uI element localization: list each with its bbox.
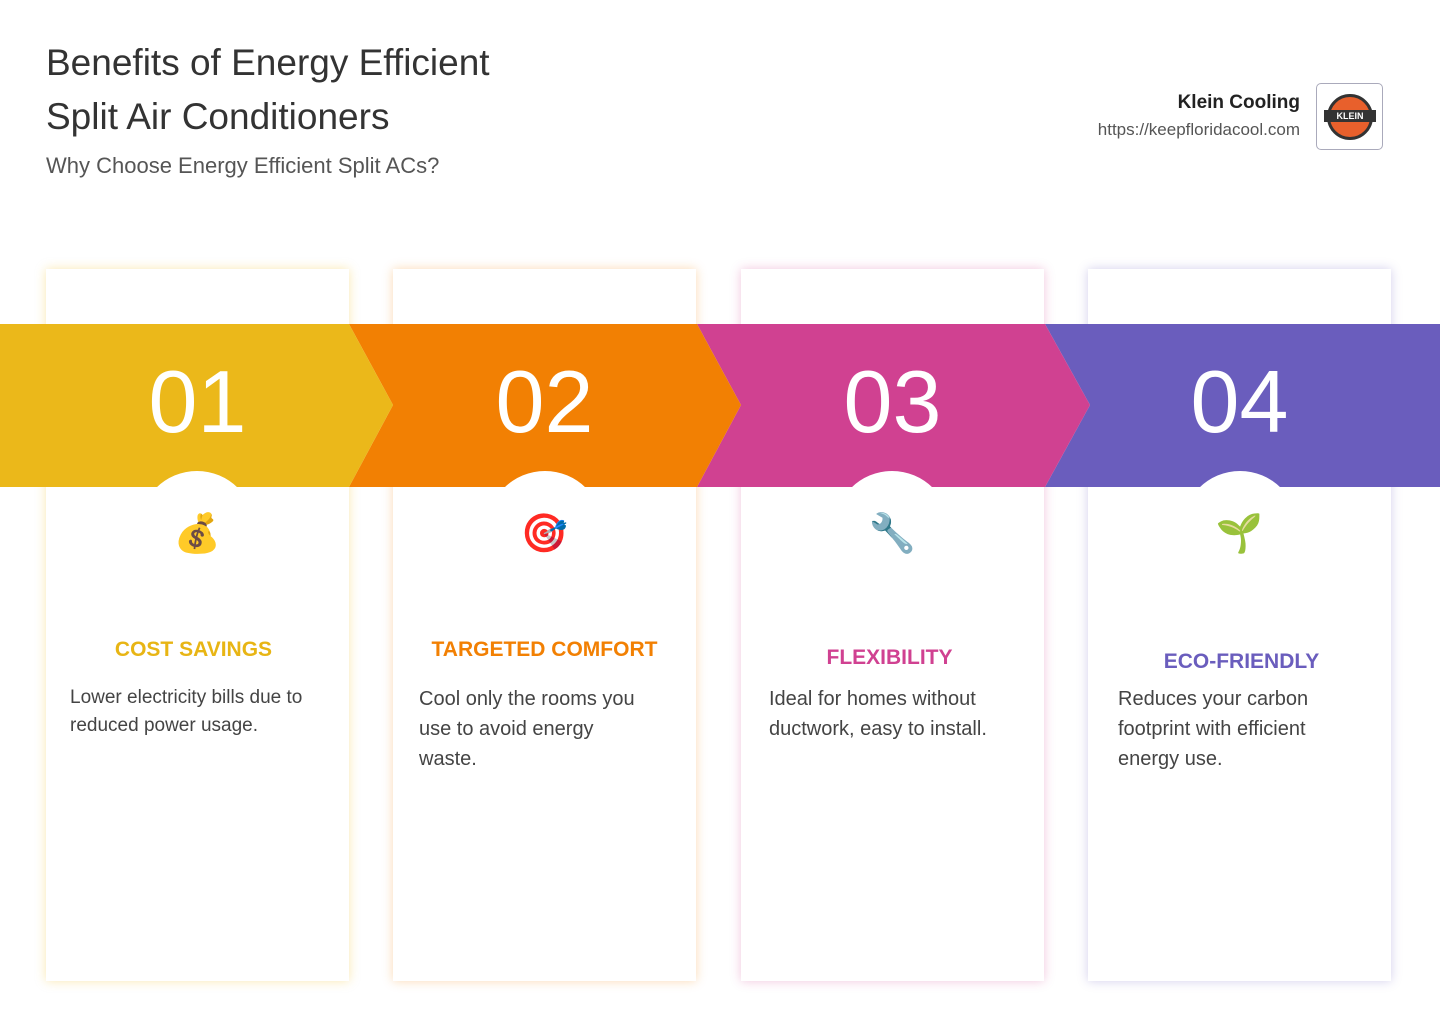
brand [1098, 92, 1300, 139]
numbers: 01 [149, 352, 246, 451]
text: waste. [419, 748, 477, 770]
brand: https://keepfloridacool.com [1098, 120, 1300, 139]
text: FLEXIBILITY [826, 646, 952, 669]
card 1 [46, 269, 349, 981]
texts: Lower electricity bills due to reduced power usage. [70, 687, 302, 736]
text: 03 [844, 352, 941, 451]
subtitle: Why Choose Energy Efficient Split ACs? [46, 153, 439, 178]
text: 04 [1191, 352, 1288, 451]
card 4 [1088, 269, 1391, 981]
title: Benefits of Energy Efficient [46, 42, 490, 83]
title: Split Air Conditioners [46, 96, 389, 137]
text: ECO-FRIENDLY [1164, 650, 1319, 673]
text: 🎯 [521, 511, 568, 555]
text: use to avoid energy [419, 718, 594, 740]
text: Ideal for homes without ductwork, easy to install. [769, 688, 987, 740]
text: 🌱 [1216, 511, 1263, 555]
text: Cool only the rooms you [419, 688, 635, 710]
title [46, 42, 490, 137]
circles [139, 471, 255, 587]
card 3 [741, 269, 1044, 981]
card 2 [393, 269, 696, 981]
text: 🔧 [869, 511, 916, 555]
text: Reduces your carbon footprint with efficient energy use. [1118, 688, 1308, 770]
icons: 💰 [174, 511, 221, 555]
brand: Klein Cooling [1178, 92, 1300, 113]
text: TARGETED COMFORT [432, 638, 657, 661]
logo: KLEIN [1336, 111, 1364, 121]
logo [1316, 83, 1383, 150]
arrow band [0, 324, 1440, 487]
text: 02 [496, 352, 593, 451]
headings: COST SAVINGS [115, 638, 272, 661]
